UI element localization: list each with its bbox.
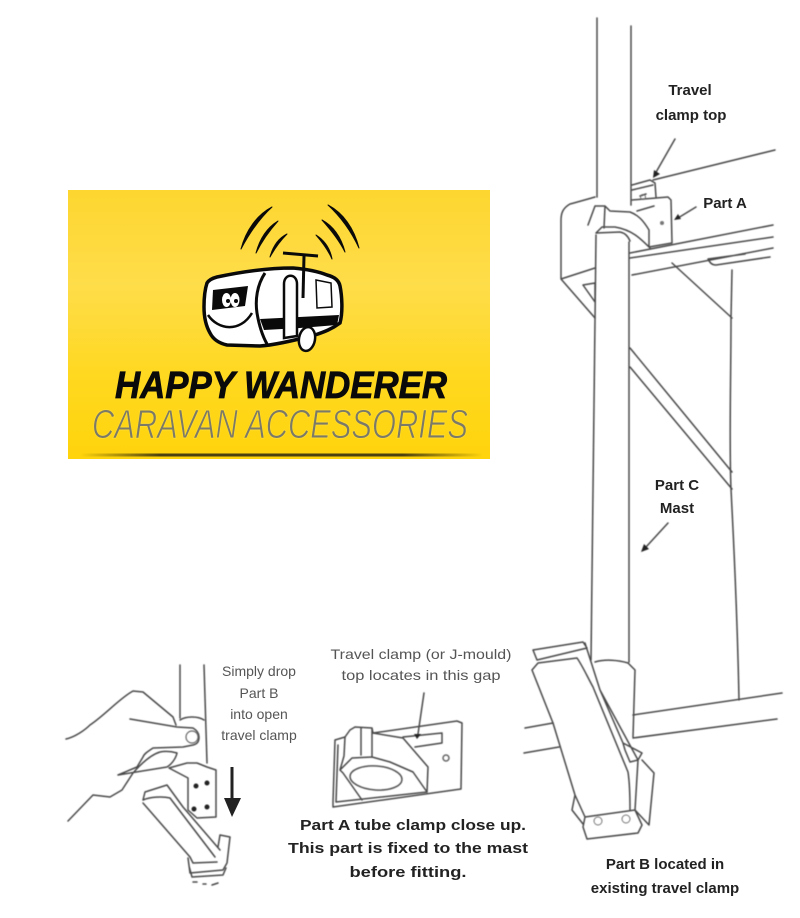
label: travel clamp gap: Travel clamp (or J-mould) xyxy=(330,646,512,662)
hand xyxy=(66,665,207,821)
caption: Part A close up: This part is fixed to the mast xyxy=(288,840,528,857)
diagram: dropping Part B by hand xyxy=(66,663,297,885)
diagonal brace xyxy=(630,348,732,489)
label: travel clamp top xyxy=(656,82,726,124)
label: simply drop: into open xyxy=(230,706,288,722)
label: simply drop xyxy=(221,663,297,743)
label: Part C Mast: Part C xyxy=(655,477,699,494)
label: simply drop: Part B xyxy=(240,685,278,701)
caption: Part A close up: before fitting. xyxy=(350,864,466,881)
label: Part C Mast xyxy=(655,477,699,517)
diagram: main mast assembly xyxy=(524,18,782,897)
label: Part C Mast: Mast xyxy=(660,500,694,517)
clamp plate xyxy=(333,721,462,807)
part A clamp xyxy=(588,180,672,248)
label: travel clamp top: clamp top xyxy=(656,107,726,124)
icon: smiling caravan xyxy=(204,253,342,352)
heading: Happy Wanderer: HAPPY WANDERER xyxy=(115,365,448,407)
label: travel clamp gap xyxy=(330,646,512,683)
mast lines xyxy=(591,18,631,662)
label: Part A: Part A xyxy=(703,195,747,212)
caption: Part A close up xyxy=(288,817,528,881)
subheading: Caravan Accessories: CARAVAN ACCESSORIES xyxy=(92,401,468,447)
panel: yellow logo xyxy=(68,190,490,459)
icon: radio waves xyxy=(241,205,359,259)
label: travel clamp gap: top locates in this gap xyxy=(342,667,501,683)
diagram: Part A close up xyxy=(288,646,528,881)
arrows xyxy=(646,139,696,547)
label: Part B located xyxy=(591,856,739,897)
icon: down arrow xyxy=(224,767,241,817)
small part B xyxy=(143,763,230,885)
label: simply drop: Simply drop xyxy=(222,663,296,679)
label: travel clamp top: Travel xyxy=(668,82,712,99)
label: Part B located: Part B located in xyxy=(606,856,724,873)
label: simply drop: travel clamp xyxy=(221,727,297,743)
bracket and rails xyxy=(561,150,775,700)
part B large xyxy=(532,642,654,839)
label: Part B located: existing travel clamp xyxy=(591,880,739,897)
caption: Part A close up: Part A tube clamp close up. xyxy=(300,817,526,834)
